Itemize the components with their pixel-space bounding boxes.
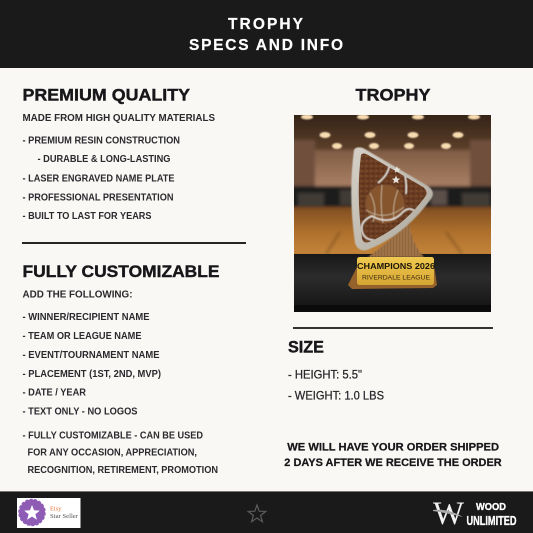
trophy stem <box>368 222 424 257</box>
text: add the following: ADD THE FOLLOWING: <box>22 290 132 301</box>
silver swoosh <box>360 166 415 242</box>
icon: purple seal <box>19 500 45 526</box>
logo: wood unlimited: WOOD <box>476 501 506 513</box>
list: quality features <box>22 136 180 222</box>
gold name plate: CHAMPIONS 2026 <box>357 261 435 271</box>
list: customization options: - EVENT/TOURNAMENT NAME <box>22 350 160 361</box>
panel: fully customizable <box>22 263 220 476</box>
list: quality features: - DURABLE & LONG-LASTING <box>38 154 171 165</box>
header band <box>0 0 533 68</box>
logo: wood unlimited: W <box>433 496 465 532</box>
heading: trophy: TROPHY <box>356 86 430 104</box>
text: materials intro: MADE FROM HIGH QUALITY MATERIALS <box>22 113 215 124</box>
callout: shipping: 2 DAYS AFTER WE RECEIVE THE ORDER <box>284 457 502 469</box>
list: customization options <box>22 312 161 418</box>
callout: shipping: WE WILL HAVE YOUR ORDER SHIPPED <box>287 442 499 454</box>
list: quality features: - PROFESSIONAL PRESENTATION <box>22 192 174 204</box>
trophy silver frame <box>351 147 433 250</box>
panel: size <box>288 339 384 402</box>
text: weight: - WEIGHT: 1.0 LBS <box>288 388 384 402</box>
logo: wood unlimited <box>433 496 516 532</box>
photo backdrop: gym <box>294 115 491 312</box>
footer band <box>0 491 533 533</box>
list: customization options: - DATE / YEAR <box>22 388 86 398</box>
heading: fully customizable: FULLY CUSTOMIZABLE <box>22 263 220 281</box>
title: SPECS AND INFO <box>189 37 343 54</box>
panel: premium quality <box>22 86 215 222</box>
badge: Etsy star seller: Star Seller <box>50 513 79 520</box>
badge: Etsy star seller: Etsy <box>50 506 62 512</box>
list: customization options: - PLACEMENT (1ST, 2ND, MVP) <box>22 369 161 380</box>
list: customization options: - WINNER/RECIPIENT NAME <box>22 312 150 323</box>
gold name plate: RIVERDALE LEAGUE <box>362 274 431 282</box>
list: quality features: - PREMIUM RESIN CONSTRUCTION <box>22 136 180 146</box>
text: customization note: FOR ANY OCCASION, APPRECIATION, <box>28 448 197 458</box>
text: customization note: RECOGNITION, RETIREMENT, PROMOTION <box>28 465 218 476</box>
stars <box>392 166 400 184</box>
badge: Etsy star seller <box>17 498 80 528</box>
trophy figure <box>348 147 437 289</box>
product photo: trophy in gym <box>294 115 491 312</box>
callout: shipping <box>284 442 502 469</box>
list: customization options: - TEXT ONLY - NO LOGOS <box>22 406 138 418</box>
icon: outline star <box>248 505 266 522</box>
text: height: - HEIGHT: 5.5" <box>288 368 362 382</box>
text: customization note: - FULLY CUSTOMIZABLE - CAN BE USED <box>22 430 203 442</box>
gold name plate <box>357 257 435 285</box>
list: quality features: - BUILT TO LAST FOR YEARS <box>22 211 152 222</box>
list: quality features: - LASER ENGRAVED NAME PLATE <box>22 174 175 184</box>
title: TROPHY <box>228 16 304 33</box>
trophy base <box>348 265 437 289</box>
text: customization note <box>22 430 218 476</box>
list: customization options: - TEAM OR LEAGUE NAME <box>22 331 142 342</box>
basketball <box>366 184 404 224</box>
ceiling lights <box>301 114 480 149</box>
trophy inner panel <box>358 154 427 242</box>
title <box>189 16 343 54</box>
heading: size: SIZE <box>288 339 324 357</box>
heading: premium quality: PREMIUM QUALITY <box>22 86 190 104</box>
